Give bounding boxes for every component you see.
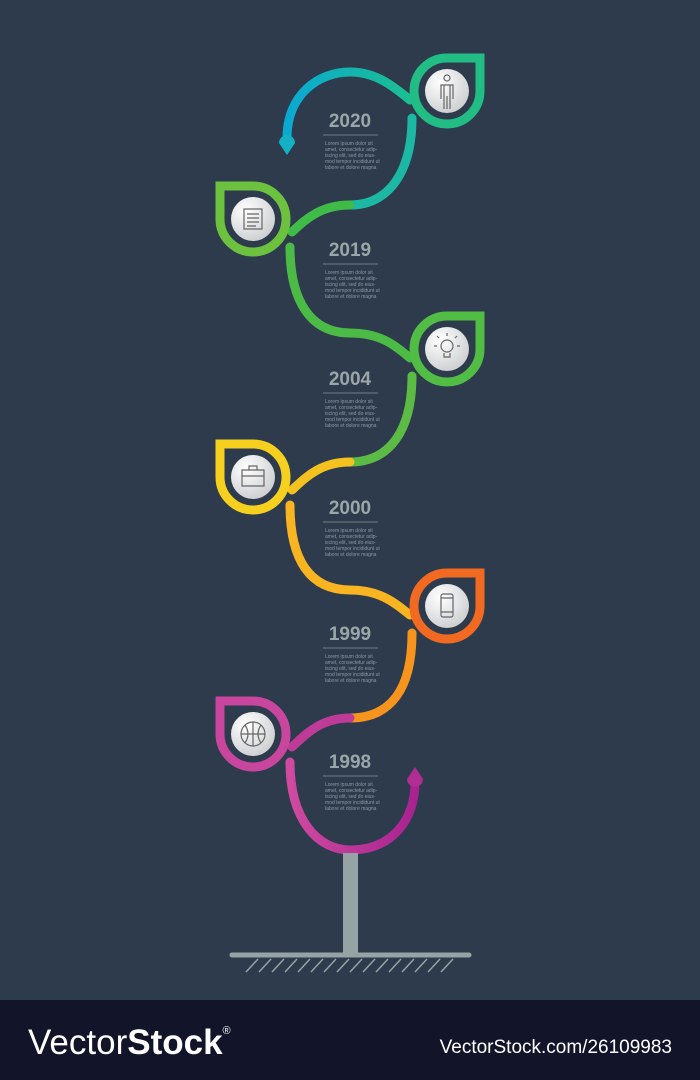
footer band: ® (223, 1025, 231, 1037)
text block: 2020: mod tempor incididunt ut (325, 159, 380, 165)
path: 1998 arc (290, 762, 415, 850)
text block: 1999: mod tempor incididunt ut (325, 672, 380, 678)
text block: 2000: 2000 (329, 498, 371, 519)
footer band: VectorStock.com/26109983 (440, 1037, 672, 1058)
text block: 1999: iscing elit, sed do eius- (325, 666, 376, 672)
tip: top teal (279, 135, 295, 155)
icon: ball (231, 712, 275, 756)
text block: 2019: iscing elit, sed do eius- (325, 282, 376, 288)
text block: 2019: Lorem ipsum dolor sit (325, 270, 373, 276)
text block: 1998: 1998 (329, 752, 371, 773)
text block: 2020: Lorem ipsum dolor sit (325, 141, 373, 147)
path: 1999 to 1998 (292, 633, 412, 747)
path: 2020 arc (287, 72, 410, 138)
text block: 1998: iscing elit, sed do eius- (325, 794, 376, 800)
text block: 2000: labore et dolore magna (325, 552, 377, 558)
icon: phone (425, 584, 469, 628)
text block: 2000: Lorem ipsum dolor sit (325, 528, 373, 534)
text block: 2004: amet, consectetur adip- (325, 405, 378, 411)
text block: 2004: 2004 (329, 369, 372, 390)
text block: 2004: mod tempor incididunt ut (325, 417, 380, 423)
text block: 1999: amet, consectetur adip- (325, 660, 378, 666)
text block: 2004: Lorem ipsum dolor sit (325, 399, 373, 405)
text block: 2000 (323, 498, 380, 558)
text block: 1999: Lorem ipsum dolor sit (325, 654, 373, 660)
icon: briefcase (231, 455, 275, 499)
text block: 2000: mod tempor incididunt ut (325, 546, 380, 552)
text block: 2020: 2020 (329, 111, 371, 132)
text block: 2004 (323, 369, 380, 429)
icon: bulb (425, 327, 469, 371)
text block: 1999: 1999 (329, 624, 371, 645)
text block: 2019: mod tempor incididunt ut (325, 288, 380, 294)
text block: 1998: labore et dolore magna (325, 806, 377, 812)
text block: 2020: amet, consectetur adip- (325, 147, 378, 153)
text block: 2004: iscing elit, sed do eius- (325, 411, 376, 417)
ground line (232, 955, 469, 972)
leaf 2020 (414, 58, 480, 124)
text block: 2019: 2019 (329, 240, 371, 261)
path: 2004 to 2000 (292, 376, 412, 490)
text block: 1998: Lorem ipsum dolor sit (325, 782, 373, 788)
text block: 2020: iscing elit, sed do eius- (325, 153, 376, 159)
path: 2019 to 2004 (290, 247, 410, 358)
text block: 2019: labore et dolore magna (325, 294, 377, 300)
text block: 2019 (323, 240, 380, 300)
text block: 2000: amet, consectetur adip- (325, 534, 378, 540)
path: 2020 to 2019 (292, 118, 412, 232)
icon: person (425, 69, 469, 113)
text block: 2019: amet, consectetur adip- (325, 276, 378, 282)
path: 2000 to 1999 (290, 505, 410, 615)
text block: 1999 (323, 624, 380, 684)
text block: 2020: labore et dolore magna (325, 165, 377, 171)
footer band: VectorStock (28, 1023, 223, 1062)
leaf 1999 (414, 573, 480, 639)
leaf 2004 (414, 316, 480, 382)
leaf 1998 (220, 701, 286, 767)
text block: 1998 (323, 752, 380, 812)
leaf 2000 (220, 444, 286, 510)
text block: 2004: labore et dolore magna (325, 423, 377, 429)
leaf 2019 (220, 186, 286, 252)
text block: 1998: amet, consectetur adip- (325, 788, 378, 794)
text block: 2020 (323, 111, 380, 171)
pole (343, 853, 358, 955)
icon: document (231, 197, 275, 241)
tip: bottom magenta (407, 767, 423, 787)
text block: 1998: mod tempor incididunt ut (325, 800, 380, 806)
footer band (0, 1000, 700, 1080)
text block: 2000: iscing elit, sed do eius- (325, 540, 376, 546)
text block: 1999: labore et dolore magna (325, 678, 377, 684)
